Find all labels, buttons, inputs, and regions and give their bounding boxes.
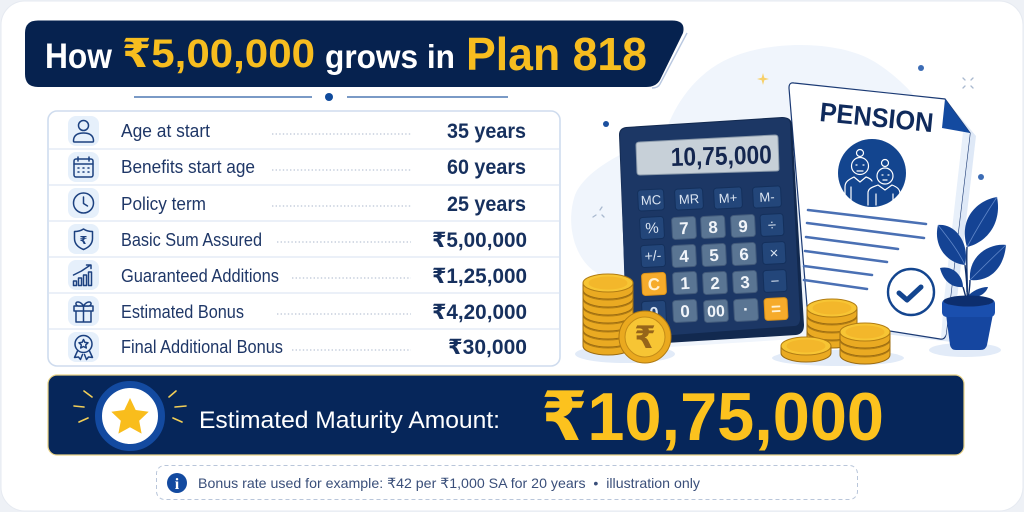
- calculator keypad: 1: [680, 274, 690, 293]
- calculator keypad: ·: [743, 300, 749, 319]
- illustration background blob: [571, 45, 940, 350]
- icon: rupee coin: ₹: [634, 320, 656, 355]
- row: policy term: Policy term: [121, 194, 206, 214]
- calculator keypad: 00: [707, 303, 725, 321]
- row: guaranteed additions: ₹1,25,000: [432, 265, 527, 288]
- calculator display: 10,75,000: [670, 139, 772, 172]
- row: estimated bonus: Estimated Bonus: [121, 302, 244, 322]
- illustration: calculator: [619, 117, 804, 345]
- panel: plan details table: [48, 111, 560, 366]
- illustration: pension document: [772, 83, 976, 366]
- decorative sparkles and dots: [593, 65, 984, 217]
- calculator keypad: ×: [769, 245, 779, 262]
- icon: star badge: [74, 384, 186, 448]
- row: benefits start age: [68, 152, 526, 182]
- row: basic sum assured: Basic Sum Assured: [121, 230, 262, 250]
- document fold: [942, 99, 970, 133]
- row: benefits start age: 60 years: [447, 156, 526, 179]
- row: policy term: [68, 188, 526, 218]
- calculator keypad: +/-: [644, 247, 662, 264]
- calculator keypad: 9: [738, 217, 748, 236]
- icon: elderly couple: [838, 139, 906, 207]
- calculator keypad: MC: [641, 192, 661, 208]
- document heading: PENSION: [818, 97, 935, 138]
- row: basic sum assured: [68, 224, 527, 254]
- calculator keypad: M+: [718, 190, 738, 206]
- title banner: [25, 20, 687, 88]
- row: guaranteed additions: Guaranteed Additions: [121, 266, 279, 286]
- calculator keypad: 6: [739, 245, 749, 264]
- icon: check mark seal: [888, 269, 934, 315]
- maturity amount banner: ₹10,75,000: [541, 379, 884, 455]
- calculator keypad: 2: [710, 274, 720, 293]
- title banner: Plan 818: [466, 28, 647, 80]
- row: policy term: 25 years: [447, 193, 526, 216]
- row: age at start: 35 years: [447, 120, 526, 143]
- row: final additional bonus: Final Additional Bonus: [121, 337, 283, 357]
- calculator keypad: =: [771, 299, 782, 319]
- calculator keypad: 7: [679, 219, 689, 238]
- row: final additional bonus: ₹30,000: [448, 336, 527, 359]
- illustration: right coin stacks: [781, 299, 890, 364]
- calculator display: [636, 135, 779, 175]
- row: basic sum assured: ₹5,00,000: [432, 229, 527, 252]
- calculator keypad: ÷: [767, 217, 777, 234]
- note: bonus rate: Bonus rate used for example: ₹42 per ₹1,000 SA for 20 years • illustration only: [198, 475, 700, 491]
- icon: info: i: [175, 476, 180, 493]
- row: estimated bonus: ₹4,20,000: [432, 301, 527, 324]
- calculator keypad: %: [645, 220, 659, 237]
- note: bonus rate: [156, 466, 858, 500]
- row: guaranteed additions: [68, 260, 527, 290]
- calculator keypad: M-: [759, 189, 775, 205]
- row: age at start: Age at start: [121, 121, 210, 141]
- calculator keypad: −: [770, 273, 780, 290]
- calculator keypad: 8: [708, 218, 718, 237]
- calculator keypad: 4: [679, 247, 690, 266]
- row: age at start: [68, 116, 526, 146]
- illustration: left coin stack with rupee coin: [575, 274, 675, 363]
- calculator keypad: 3: [740, 273, 750, 292]
- document text lines: [804, 210, 926, 289]
- icon: info: [167, 473, 187, 493]
- maturity amount banner: Estimated Maturity Amount:: [199, 407, 500, 434]
- calculator keypad: 0: [649, 305, 659, 322]
- calculator keypad: MR: [679, 191, 699, 207]
- calculator keypad: C: [647, 275, 661, 294]
- row: basic sum assured: ₹: [80, 235, 88, 247]
- title banner: grows in: [325, 38, 455, 75]
- maturity amount banner: [48, 375, 964, 455]
- title banner: ₹5,00,000: [122, 32, 315, 76]
- calculator keypad: [637, 186, 788, 324]
- row: final additional bonus: [68, 332, 527, 362]
- row: benefits start age: Benefits start age: [121, 157, 255, 177]
- row: estimated bonus: [68, 296, 527, 326]
- calculator keypad: 0: [680, 302, 690, 321]
- title banner: How: [45, 37, 113, 76]
- title divider: [134, 93, 508, 101]
- illustration: potted plant: [929, 197, 1006, 357]
- calculator keypad: 5: [709, 246, 719, 265]
